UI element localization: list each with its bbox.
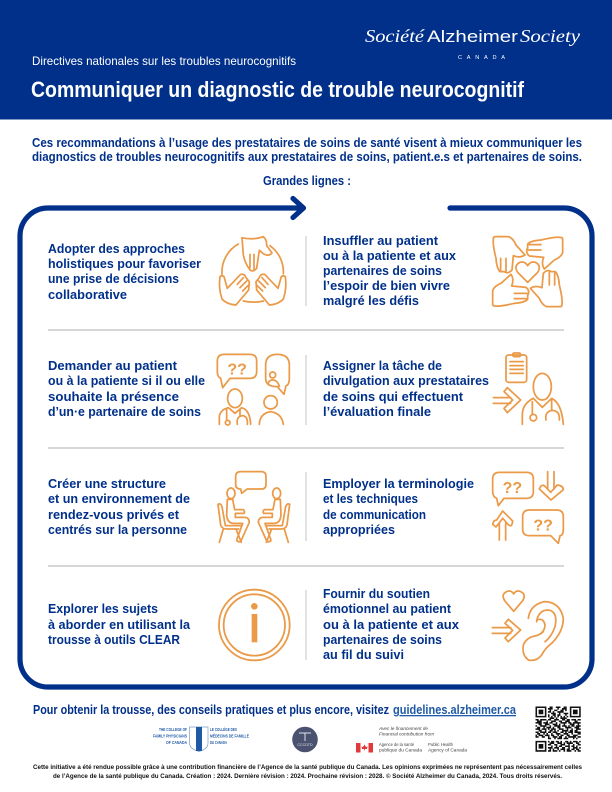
item 1: holistic approaches bbox=[48, 241, 201, 302]
logo: Société Alzheimer Society: Alzheimer bbox=[427, 28, 519, 46]
item 4: assign disclosure: l’évaluation finale bbox=[323, 404, 431, 419]
logo: College of Family Physicians bbox=[153, 725, 249, 752]
item 3: care partner bbox=[48, 358, 205, 419]
item 3: care partner: ou à la patiente si il ou elle bbox=[48, 373, 205, 388]
icon: two seated people talking bbox=[218, 472, 290, 542]
QR code bbox=[536, 707, 581, 751]
logo: CCCDTD: CCCDTD bbox=[297, 743, 313, 747]
item 1: holistic approaches: collaborative bbox=[48, 287, 127, 302]
logo: College of Family Physicians: OF CANADA bbox=[166, 740, 188, 745]
logo: CCCDTD bbox=[292, 727, 318, 752]
header banner bbox=[0, 0, 612, 120]
item 3: care partner: d’un·e partenaire de soins bbox=[48, 404, 201, 419]
item 5: private environment: et un environnement de bbox=[48, 491, 190, 506]
item 8: emotional support: partenaires de soins bbox=[323, 632, 442, 647]
item 7: CLEAR toolkit: à aborder en utilisant la bbox=[48, 617, 191, 632]
icon: speech bubbles and arrows: ?? bbox=[533, 518, 553, 535]
item 2: hope bbox=[323, 233, 457, 308]
logo: Public Health Agency of Canada bbox=[356, 726, 467, 752]
item 2: hope: partenaires de soins bbox=[323, 263, 442, 278]
icon: clipboard, arrow and doctor bbox=[493, 353, 563, 424]
logo: Public Health Agency of Canada: publique du Canada bbox=[379, 748, 422, 752]
item 5: private environment bbox=[48, 476, 190, 537]
item 1: holistic approaches: une prise de décisions bbox=[48, 271, 179, 286]
icon: three hands in circle bbox=[219, 237, 286, 305]
frame with arrow bbox=[20, 198, 592, 687]
logo: Public Health Agency of Canada: Financial contribution from bbox=[379, 732, 434, 736]
call to action: guidelines.alzheimer.ca bbox=[393, 702, 517, 717]
disclaimer: de l’Agence de la santé publique du Canada. Création : 2024. Dernière révision : 2024. Prochaine révision : 2028. © Société Alzheimer du Canada, 2024. Tous droits réservés. bbox=[53, 772, 562, 780]
item 2: hope: malgré les défis bbox=[323, 293, 419, 308]
icon: speech bubbles and arrows bbox=[493, 472, 563, 543]
item 3: care partner: souhaite la présence bbox=[48, 389, 179, 404]
logo: College of Family Physicians: LE COLLÈGE DES bbox=[210, 725, 237, 732]
item 6: terminology: appropriées bbox=[323, 522, 395, 537]
item 4: assign disclosure: Assigner la tâche de bbox=[323, 358, 442, 373]
item 7: CLEAR toolkit: Explorer les sujets bbox=[48, 601, 158, 616]
item 6: terminology: et les techniques bbox=[323, 491, 418, 506]
item 7: CLEAR toolkit: trousse à outils CLEAR bbox=[48, 632, 181, 647]
item 2: hope: l’espoir de bien vivre bbox=[323, 278, 450, 293]
icon: doctor and person with speech bubbles: ?? bbox=[227, 361, 247, 378]
icon: information circle bbox=[219, 590, 290, 660]
item 8: emotional support bbox=[323, 586, 460, 662]
icon: doctor and person with speech bubbles bbox=[217, 354, 289, 425]
icon: speech bubbles and arrows: ?? bbox=[503, 480, 522, 497]
icon: four hands around heart bbox=[493, 237, 563, 307]
intro text bbox=[32, 135, 582, 164]
item 5: private environment: Créer une structure bbox=[48, 476, 166, 491]
item 7: CLEAR toolkit bbox=[48, 601, 191, 647]
item 8: emotional support: au fil du suivi bbox=[323, 647, 404, 662]
item 5: private environment: centrés sur la personne bbox=[48, 522, 187, 537]
item 8: emotional support: ou à la patiente et aux bbox=[323, 617, 460, 632]
item 1: holistic approaches: Adopter des approches bbox=[48, 241, 185, 256]
item 6: terminology bbox=[323, 476, 474, 537]
item 4: assign disclosure bbox=[323, 358, 489, 419]
logo: Public Health Agency of Canada: Public Health bbox=[428, 742, 453, 747]
logo: College of Family Physicians: DU CANADA bbox=[210, 740, 227, 745]
logo: Public Health Agency of Canada: Avec le financement de bbox=[378, 726, 428, 731]
call to action: Pour obtenir la trousse, des conseils pratiques et plus encore, visitez bbox=[33, 702, 389, 717]
heading: Grandes lignes: Grandes lignes : bbox=[263, 173, 351, 188]
item 8: emotional support: Fournir du soutien bbox=[323, 586, 430, 601]
logo: College of Family Physicians: FAMILY PHYSICIANS bbox=[153, 734, 187, 738]
logo: Public Health Agency of Canada: Agency of Canada bbox=[428, 748, 467, 752]
logo: Société Alzheimer Society bbox=[365, 26, 580, 61]
subtitle: Directives nationales sur les troubles neurocognitifs bbox=[32, 54, 296, 68]
logo: Société Alzheimer Society: Société bbox=[365, 26, 425, 46]
icon: heart, arrow and ear bbox=[492, 591, 563, 660]
item 6: terminology: de communication bbox=[323, 507, 426, 522]
item 8: emotional support: émotionnel au patient bbox=[323, 601, 452, 616]
item 2: hope: Insuffler au patient bbox=[323, 233, 439, 248]
item 2: hope: ou à la patiente et aux bbox=[323, 248, 457, 263]
logo: College of Family Physicians: MÉDECINS DE FAMILLE bbox=[210, 732, 249, 738]
item 4: assign disclosure: divulgation aux prestataires bbox=[323, 373, 489, 388]
item 6: terminology: Employer la terminologie bbox=[323, 476, 474, 491]
title: Communiquer un diagnostic de trouble neurocognitif bbox=[31, 77, 524, 102]
item 3: care partner: Demander au patient bbox=[48, 358, 178, 373]
item 4: assign disclosure: de soins qui effectuent bbox=[323, 389, 464, 404]
logo: College of Family Physicians: THE COLLEGE OF bbox=[159, 727, 187, 732]
item 1: holistic approaches: holistiques pour favoriser bbox=[48, 256, 201, 271]
item 5: private environment: rendez-vous privés et bbox=[48, 507, 180, 522]
disclaimer bbox=[33, 764, 582, 780]
logo: Société Alzheimer Society: Society bbox=[520, 26, 580, 46]
logo: Société Alzheimer Society: CANADA bbox=[458, 55, 505, 61]
logo: Public Health Agency of Canada: Agence de la santé bbox=[379, 742, 414, 747]
